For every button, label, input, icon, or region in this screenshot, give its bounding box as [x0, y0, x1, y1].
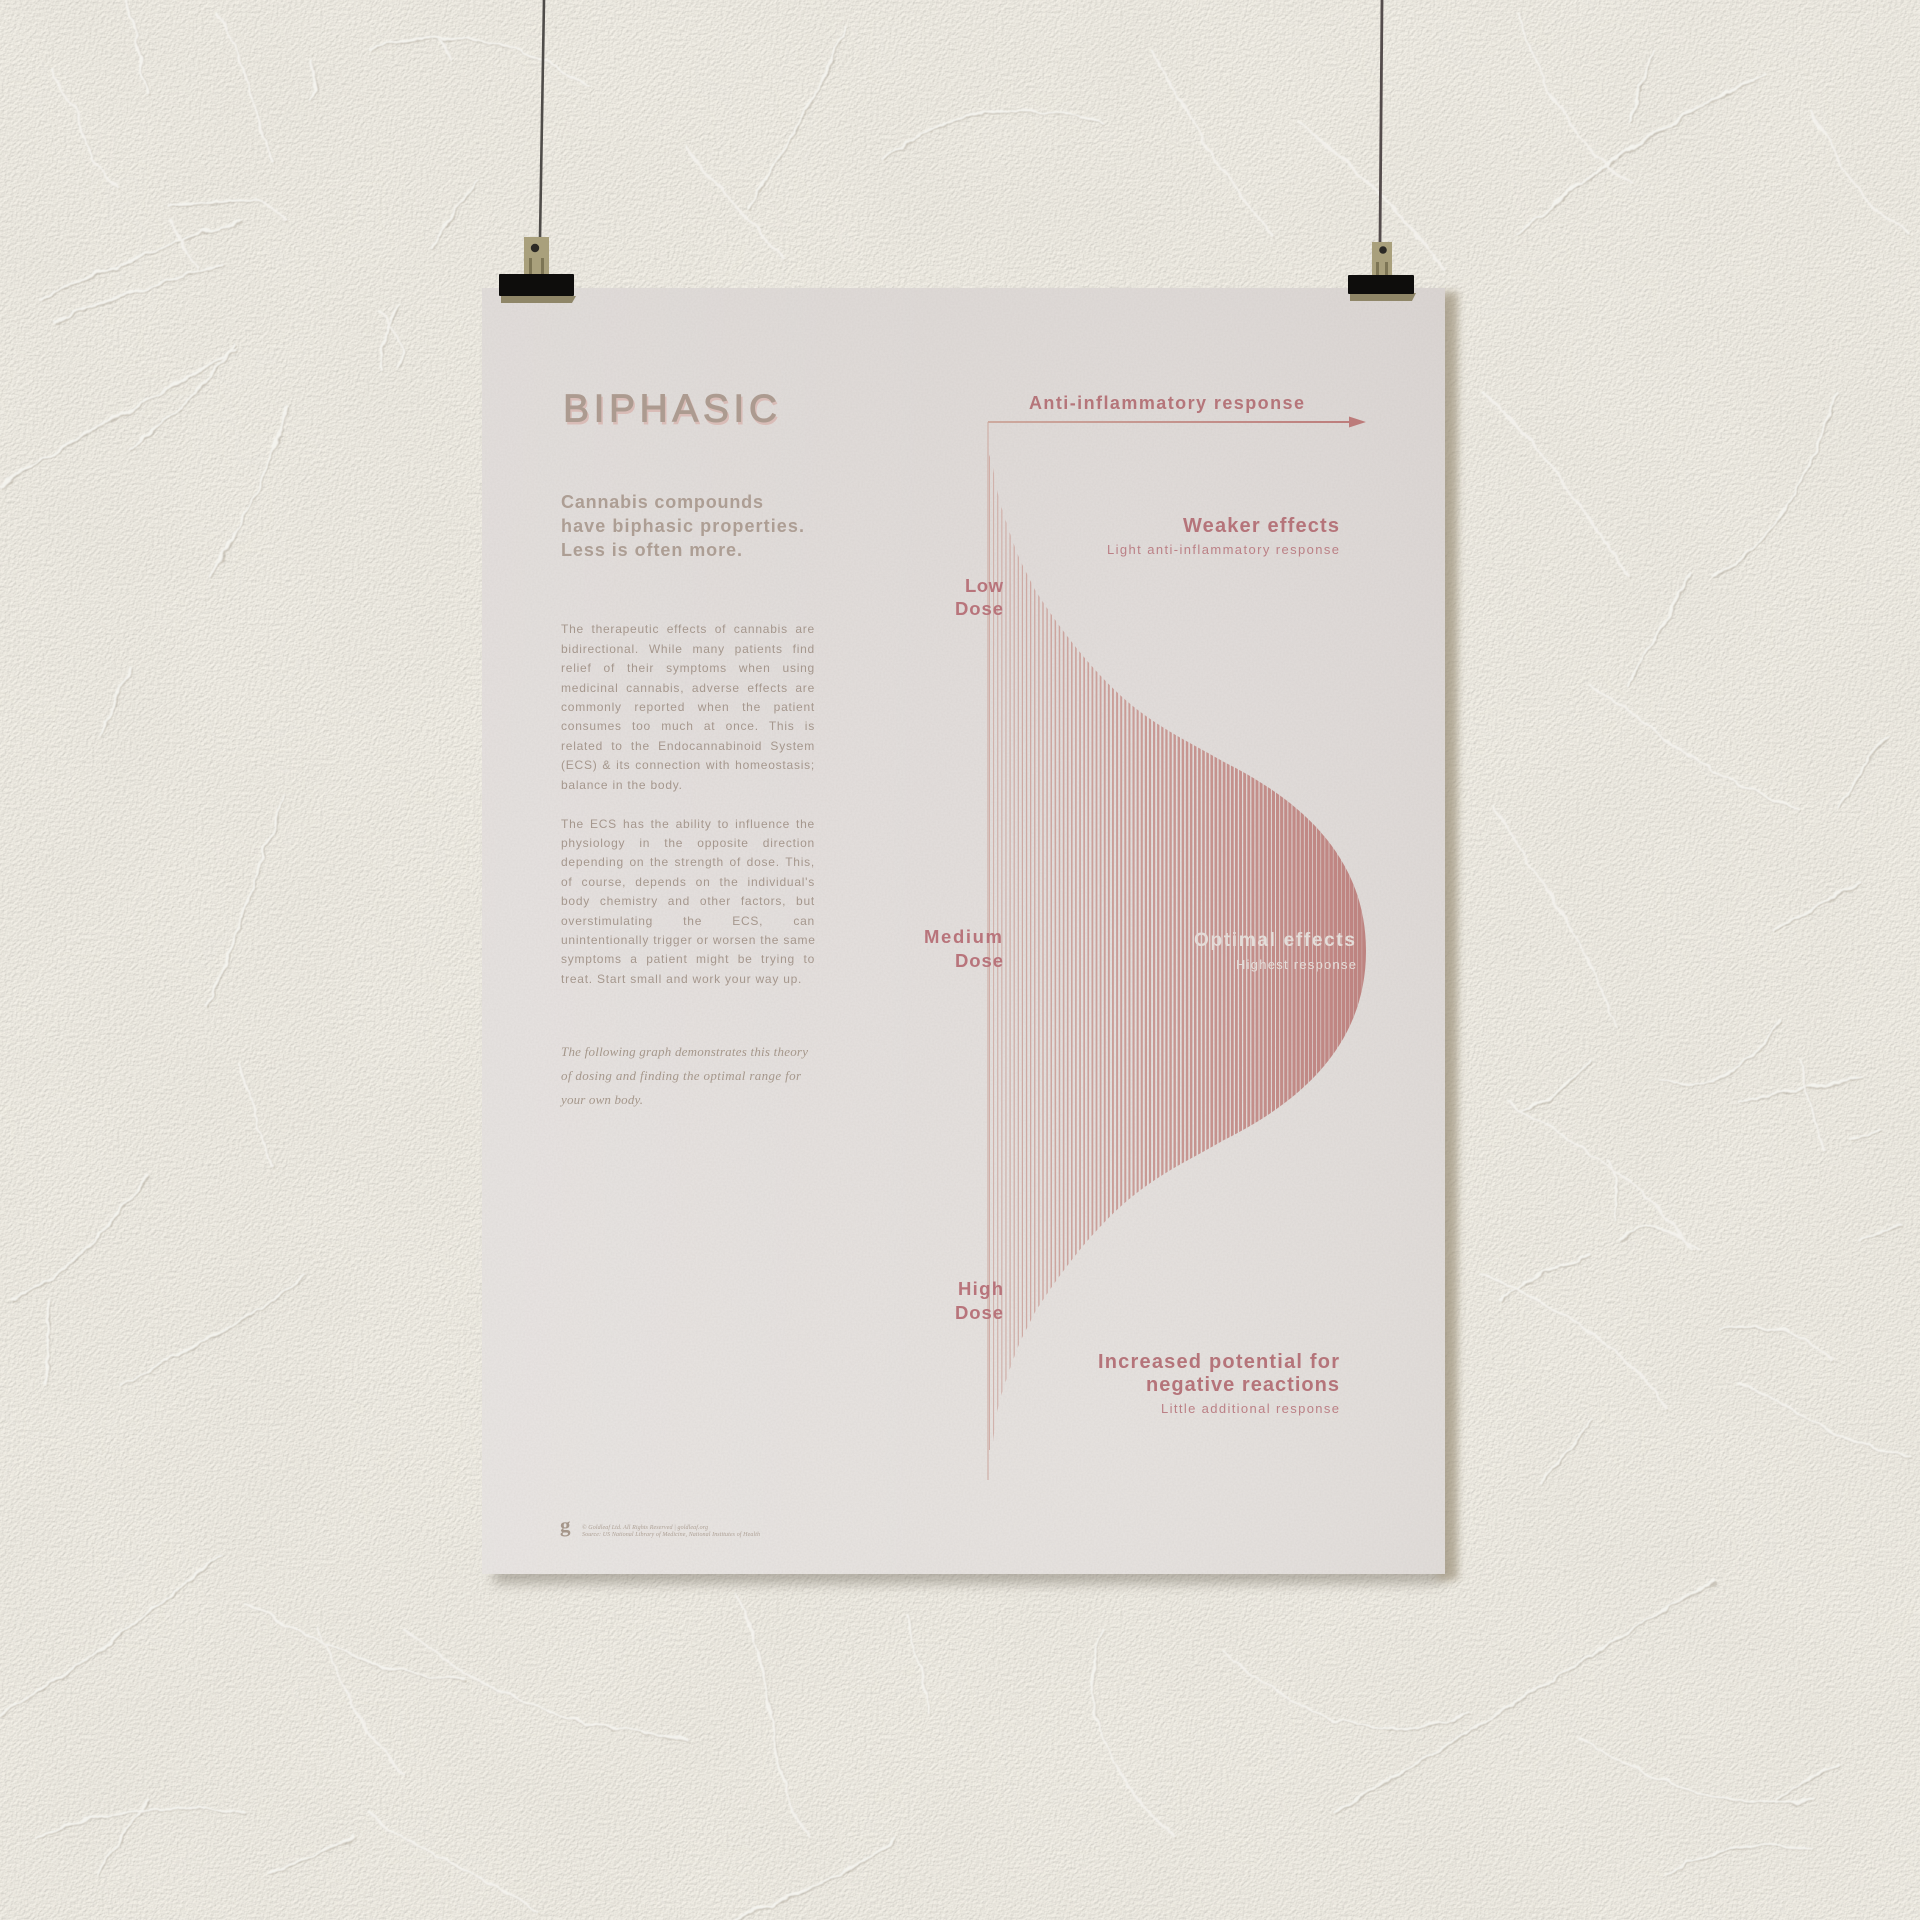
- label: weaker effects: [1107, 515, 1339, 557]
- label: increased potential: negative reactions: [1146, 1374, 1339, 1396]
- body paragraph 2: unintentionally trigger or worsen the same: [561, 933, 816, 947]
- left clip and wire: [499, 0, 576, 303]
- label: optimal effects: [1194, 930, 1356, 972]
- body paragraph 1: related to the Endocannabinoid System: [561, 739, 815, 753]
- label: high dose: [955, 1278, 1003, 1323]
- label: low dose: Low: [965, 575, 1004, 596]
- subheading: have biphasic properties.: [561, 516, 804, 536]
- body paragraph 2: of course, depends on the individual's: [561, 875, 815, 889]
- body paragraph 1: balance in the body.: [561, 778, 683, 792]
- label: medium dose: [924, 926, 1003, 971]
- vertical dose axis: [987, 422, 989, 1480]
- italic note: your own body.: [559, 1092, 643, 1107]
- body paragraph 1: The therapeutic effects of cannabis are: [561, 622, 815, 636]
- body paragraph 1: (ECS) & its connection with homeostasis;: [561, 758, 815, 772]
- response axis arrow: [988, 416, 1366, 428]
- label: high dose: Dose: [955, 1302, 1003, 1323]
- italic note: [559, 1044, 808, 1107]
- title: BIPHASIC: [564, 390, 778, 433]
- subheading: Less is often more.: [561, 540, 742, 560]
- body paragraph 1: relief of their symptoms when using: [561, 661, 815, 675]
- label: increased potential: Increased potential for: [1098, 1351, 1339, 1373]
- label: low dose: [955, 575, 1004, 619]
- label: high dose: High: [958, 1278, 1003, 1299]
- label: medium dose: Medium: [924, 926, 1002, 947]
- body paragraph 1: consumes too much at once. This is: [561, 719, 815, 733]
- subheading: Cannabis compounds: [561, 492, 763, 512]
- label: weaker effects: Weaker effects: [1183, 515, 1339, 537]
- body paragraph 2: symptoms a patient might be trying to: [561, 952, 815, 966]
- body paragraph 2: treat. Start small and work your way up.: [561, 972, 802, 986]
- body paragraph 2: The ECS has the ability to influence the: [561, 817, 815, 831]
- body paragraph 2: physiology in the opposite direction: [561, 836, 815, 850]
- body paragraph 2: body chemistry and other factors, but: [561, 894, 815, 908]
- label: increased potential: Little additional response: [1161, 1401, 1339, 1416]
- italic note: of dosing and finding the optimal range for: [561, 1068, 802, 1083]
- footer credits: [582, 1524, 760, 1538]
- striped bell curve: [989, 440, 1366, 1480]
- body paragraph 1: [561, 622, 815, 792]
- italic note: The following graph demonstrates this theory: [561, 1044, 808, 1059]
- footer credits: Source: US National Library of Medicine, National Institutes of Health: [582, 1531, 760, 1538]
- axis title: Anti-inflammatory response: [1029, 393, 1304, 413]
- footer credits: © Goldleaf Ltd. All Rights Reserved | goldleaf.org: [582, 1524, 708, 1531]
- body paragraph 2: [561, 817, 816, 986]
- body paragraph 1: medicinal cannabis, adverse effects are: [561, 681, 815, 695]
- body paragraph 2: depending on the strength of dose. This,: [561, 855, 815, 869]
- subheading: [561, 492, 804, 560]
- body paragraph 2: overstimulating the ECS, can: [561, 914, 815, 928]
- bell curve chart: [987, 416, 1366, 1480]
- label: increased potential: [1098, 1351, 1339, 1416]
- footer logo: g: [560, 1513, 571, 1537]
- label: medium dose: Dose: [955, 950, 1003, 971]
- label: weaker effects: Light anti-inflammatory response: [1107, 542, 1339, 557]
- label: optimal effects: Highest response: [1236, 957, 1356, 972]
- body paragraph 1: commonly reported when the patient: [561, 700, 815, 714]
- right clip and wire: [1348, 0, 1416, 301]
- label: optimal effects: Optimal effects: [1194, 930, 1355, 951]
- title: BIPHASIC: [563, 388, 777, 430]
- label: low dose: Dose: [955, 598, 1003, 619]
- body paragraph 1: bidirectional. While many patients find: [561, 642, 815, 656]
